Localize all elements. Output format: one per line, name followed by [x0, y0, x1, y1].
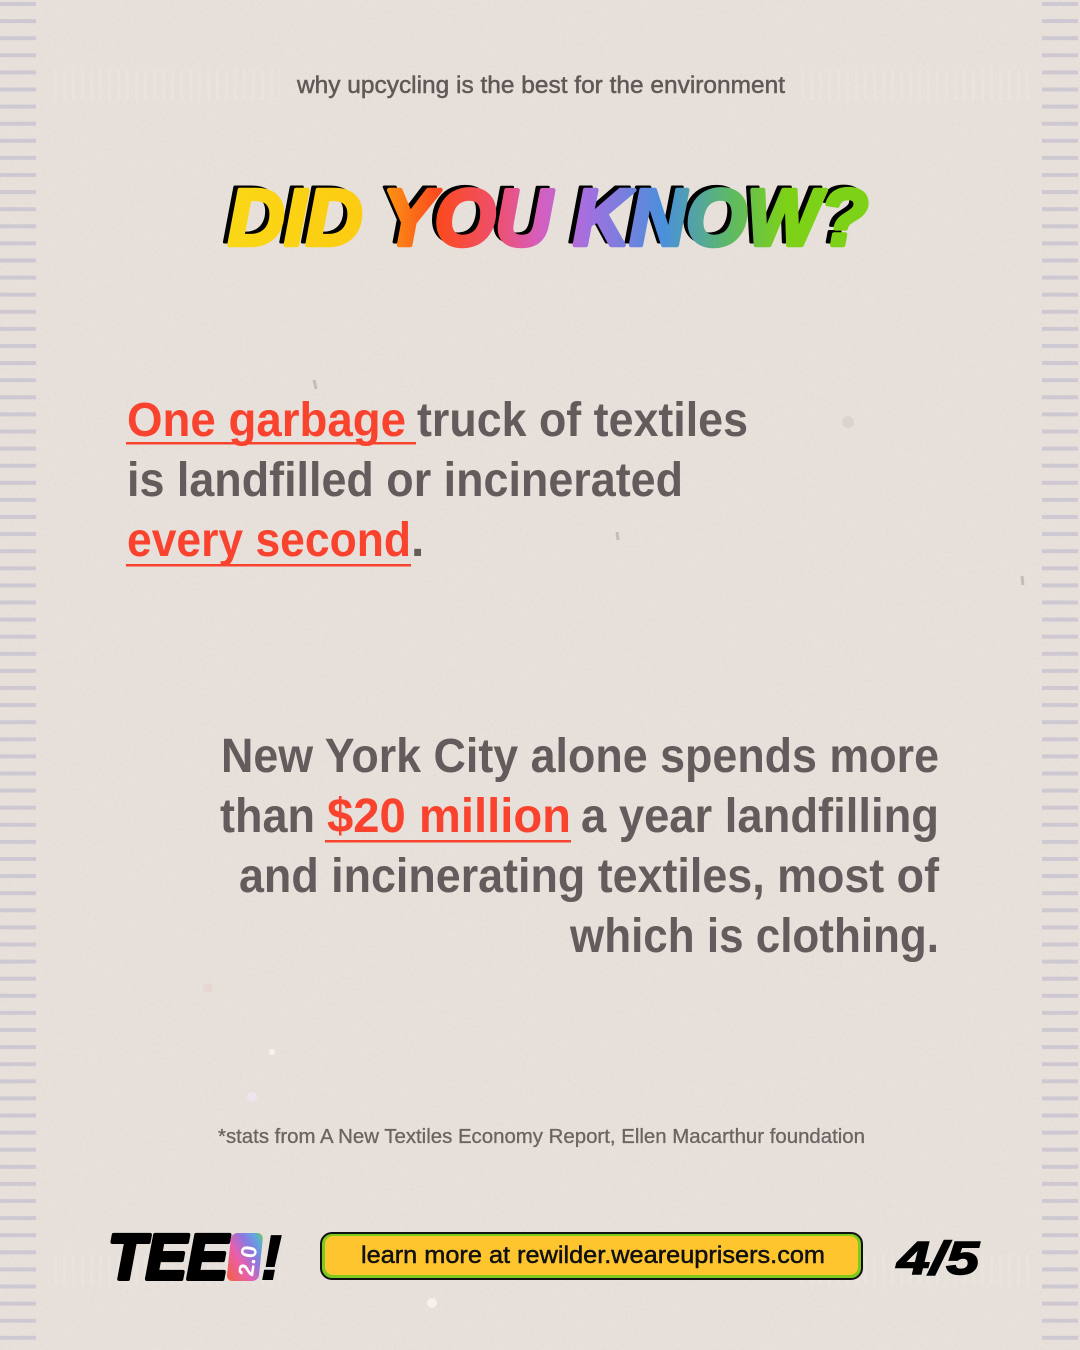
statistic: garbage truck: is landfilled or incinerated — [127, 454, 683, 507]
faint bottom band — [50, 1255, 1030, 1285]
logo: tee 2.0: 2.0 — [233, 1244, 262, 1278]
kicker heading: why upcycling is the best for the environment — [296, 72, 785, 99]
call to action button — [321, 1233, 862, 1279]
statistic: new york city — [220, 730, 940, 963]
statistic: new york city: than — [220, 790, 315, 843]
title: did you know: DID YOU KNOW? — [228, 173, 868, 262]
statistic: new york city: a year landfilling — [581, 790, 939, 843]
logo: tee 2.0: TEE — [108, 1221, 230, 1293]
left edge stripes — [0, 0, 36, 1350]
statistic: new york city: and incinerating textiles, most of — [239, 850, 940, 903]
statistic: garbage truck: every second — [127, 514, 411, 567]
statistic: garbage truck — [126, 394, 748, 567]
statistic: new york city: which is clothing. — [569, 910, 939, 963]
logo: tee 2.0: ! — [261, 1224, 282, 1293]
right edge stripes — [1042, 0, 1078, 1350]
statistic: garbage truck: . — [411, 514, 424, 567]
page number: 4/5 — [896, 1232, 981, 1284]
source footnote: *stats from A New Textiles Economy Report, Ellen Macarthur foundation — [218, 1126, 865, 1148]
call to action button: learn more at rewilder.weareuprisers.com — [361, 1242, 825, 1269]
statistic: new york city: $20 million — [327, 790, 571, 843]
title: did you know: DID YOU KNOW? — [223, 170, 863, 259]
statistic: garbage truck: truck of textiles — [417, 394, 748, 447]
statistic: new york city: New York City alone spends more — [221, 730, 939, 783]
faint top band — [50, 70, 1030, 100]
statistic: garbage truck: One garbage — [127, 394, 406, 447]
